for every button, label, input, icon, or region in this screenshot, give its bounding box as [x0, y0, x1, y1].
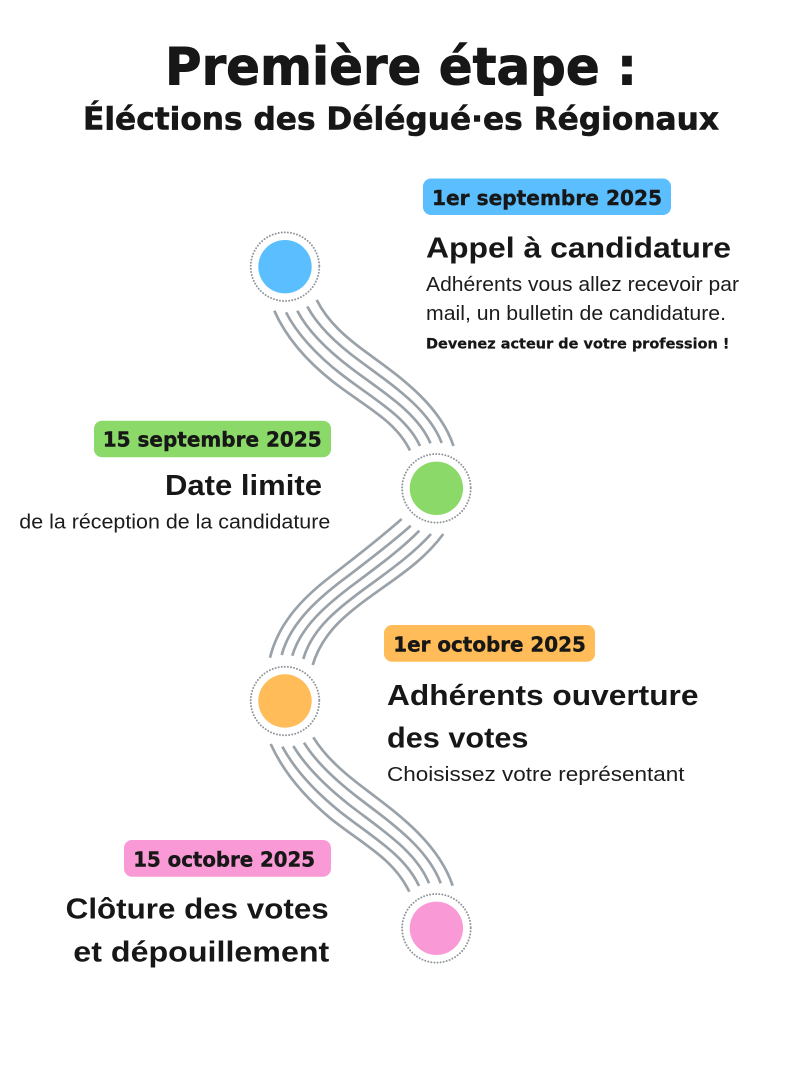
date pill: 15 septembre 2025 [94, 421, 331, 457]
panel: step 2 date limite [19, 421, 331, 533]
description: Choisissez votre représentant [387, 764, 685, 786]
title [83, 37, 719, 138]
date pill: 1er octobre 2025: 1er octobre 2025 [393, 633, 586, 657]
heading: Appel à candidature [426, 232, 731, 264]
step 3 marker: orange circle [251, 667, 319, 735]
heading: Adhérents ouverture [387, 680, 698, 712]
panel: step 4 clôture des votes [66, 840, 331, 969]
date pill: 15 septembre 2025: 15 septembre 2025 [103, 428, 322, 452]
description: de la réception de la candidature [19, 511, 330, 533]
curved lines: step 2 to step 3 [270, 519, 443, 665]
curved lines: step 3 to step 4 [271, 737, 453, 892]
description: mail, un bulletin de candidature. [426, 303, 726, 325]
title: Éléctions des Délégué·es Régionaux [83, 102, 719, 138]
panel: step 3 ouverture des votes [384, 625, 698, 786]
description [426, 274, 739, 325]
heading: des votes [387, 722, 528, 754]
heading: Clôture des votes [66, 893, 329, 925]
heading: Date limite [165, 470, 322, 502]
heading [387, 680, 698, 754]
date pill: 1er septembre 2025 [423, 178, 671, 215]
step 4 marker: pink circle [402, 894, 471, 963]
panel: step 1 appel à candidature [423, 178, 739, 352]
heading: et dépouillement [73, 937, 330, 969]
step 2 marker: green circle [402, 454, 471, 523]
step 1 marker: blue circle [251, 232, 319, 301]
date pill: 15 octobre 2025: 15 octobre 2025 [133, 848, 315, 872]
curved lines: step 1 to step 2 [274, 300, 454, 450]
date pill: 1er septembre 2025: 1er septembre 2025 [432, 186, 662, 210]
description: Adhérents vous allez recevoir par [426, 274, 739, 296]
title: Première étape : [165, 37, 637, 97]
call to action: Devenez acteur de votre profession ! [426, 336, 730, 352]
heading [66, 893, 330, 969]
date pill: 15 octobre 2025 [124, 840, 331, 877]
date pill: 1er octobre 2025 [384, 625, 595, 662]
